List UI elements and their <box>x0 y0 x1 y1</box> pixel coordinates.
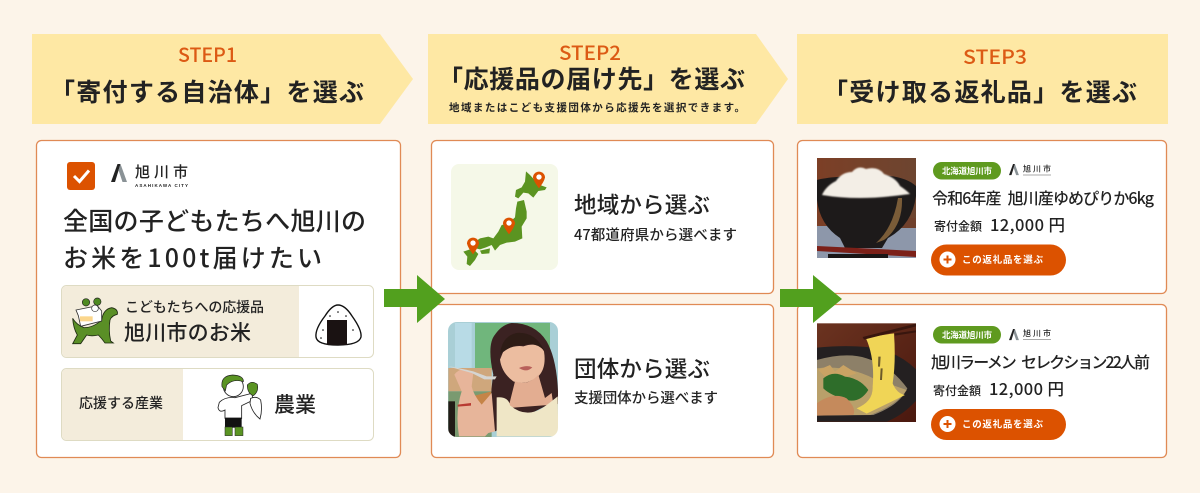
logo: small: 旭川市 <box>1023 328 1051 339</box>
pill: Hokkaido Asahikawa: 北海道旭川市 <box>942 165 992 177</box>
panel: choose by region <box>432 140 774 294</box>
banner: step 3: 「受け取る返礼品」を選ぶ <box>823 73 1137 109</box>
button: choose this gift: この返礼品を選ぶ <box>962 416 1043 430</box>
card: supported gift: こどもたちへの応援品 <box>125 297 264 317</box>
button: choose this gift <box>931 244 1066 276</box>
icon: orange checkbox <box>67 162 95 190</box>
panel: ramen gift <box>798 304 1166 458</box>
card: supported industry <box>62 368 374 440</box>
icon: rice ball <box>316 305 361 345</box>
button: choose this gift <box>931 409 1066 440</box>
banner: step 3 <box>797 34 1168 124</box>
card: supported industry: 農業 <box>274 389 316 419</box>
logo: Asahikawa city <box>111 161 188 188</box>
banner: step 2: STEP2 <box>559 37 621 66</box>
map of Japan with pins <box>451 164 558 270</box>
panel: choose by organization: 支援団体から選べます <box>574 387 718 408</box>
panel: ramen gift: 12,000 円 <box>989 376 1064 400</box>
photo: bowl of rice <box>817 158 916 258</box>
banner: step 2: 地域またはこども支援団体から応援先を選択できます。 <box>449 100 745 115</box>
panel: rice gift <box>798 140 1166 294</box>
arrow: step 2 to step 3 <box>780 275 842 323</box>
card: supported gift <box>62 286 374 358</box>
logo: small <box>1009 164 1051 176</box>
arrow: step 1 to step 2 <box>384 275 445 323</box>
banner: step 3: STEP3 <box>963 41 1027 70</box>
banner: step 1: 「寄付する自治体」を選ぶ <box>50 73 364 109</box>
panel: choose by organization: 団体から選ぶ <box>574 352 710 384</box>
photo: girl eating <box>448 322 558 437</box>
banner: step 1 <box>32 34 413 124</box>
photo: ramen <box>817 323 917 423</box>
icon: farmer with radish <box>218 375 262 436</box>
panel: step 1 municipality <box>36 140 400 458</box>
panel: choose by region: 47都道府県から選べます <box>574 224 737 245</box>
button: choose this gift: この返礼品を選ぶ <box>962 252 1043 266</box>
heading: project title: 全国の子どもたちへ旭川の <box>63 202 366 238</box>
panel: rice gift: 12,000 円 <box>990 212 1065 236</box>
card: supported gift: 旭川市のお米 <box>124 317 251 347</box>
pill: Hokkaido Asahikawa <box>933 326 1001 344</box>
card: supported industry: 応援する産業 <box>79 393 163 413</box>
banner: step 2 <box>428 34 788 124</box>
banner: step 1: STEP1 <box>178 39 237 68</box>
panel: rice gift: 令和6年産 旭川産ゆめぴりか6kg <box>932 185 1154 209</box>
panel: ramen gift: 旭川ラーメン セレクション22人前 <box>931 349 1150 373</box>
banner: step 2: 「応援品の届け先」を選ぶ <box>438 60 745 96</box>
panel: rice gift: 寄付金額 <box>934 218 982 234</box>
heading: project title: お米を100t届けたい <box>63 239 322 275</box>
logo: small <box>1009 328 1051 340</box>
panel: ramen gift: 寄付金額 <box>933 382 981 399</box>
icon: dinosaur carrying box <box>73 298 117 344</box>
pill: Hokkaido Asahikawa <box>933 162 1001 180</box>
logo: small: 旭川市 <box>1023 164 1051 174</box>
heading: project title <box>63 202 366 275</box>
logo: Asahikawa city: 旭川市 <box>135 161 188 182</box>
panel: choose by organization <box>432 304 774 458</box>
logo: Asahikawa city: ASAHIKAWA CITY <box>135 183 188 188</box>
panel: choose by region: 地域から選ぶ <box>574 188 710 220</box>
pill: Hokkaido Asahikawa: 北海道旭川市 <box>942 329 992 341</box>
